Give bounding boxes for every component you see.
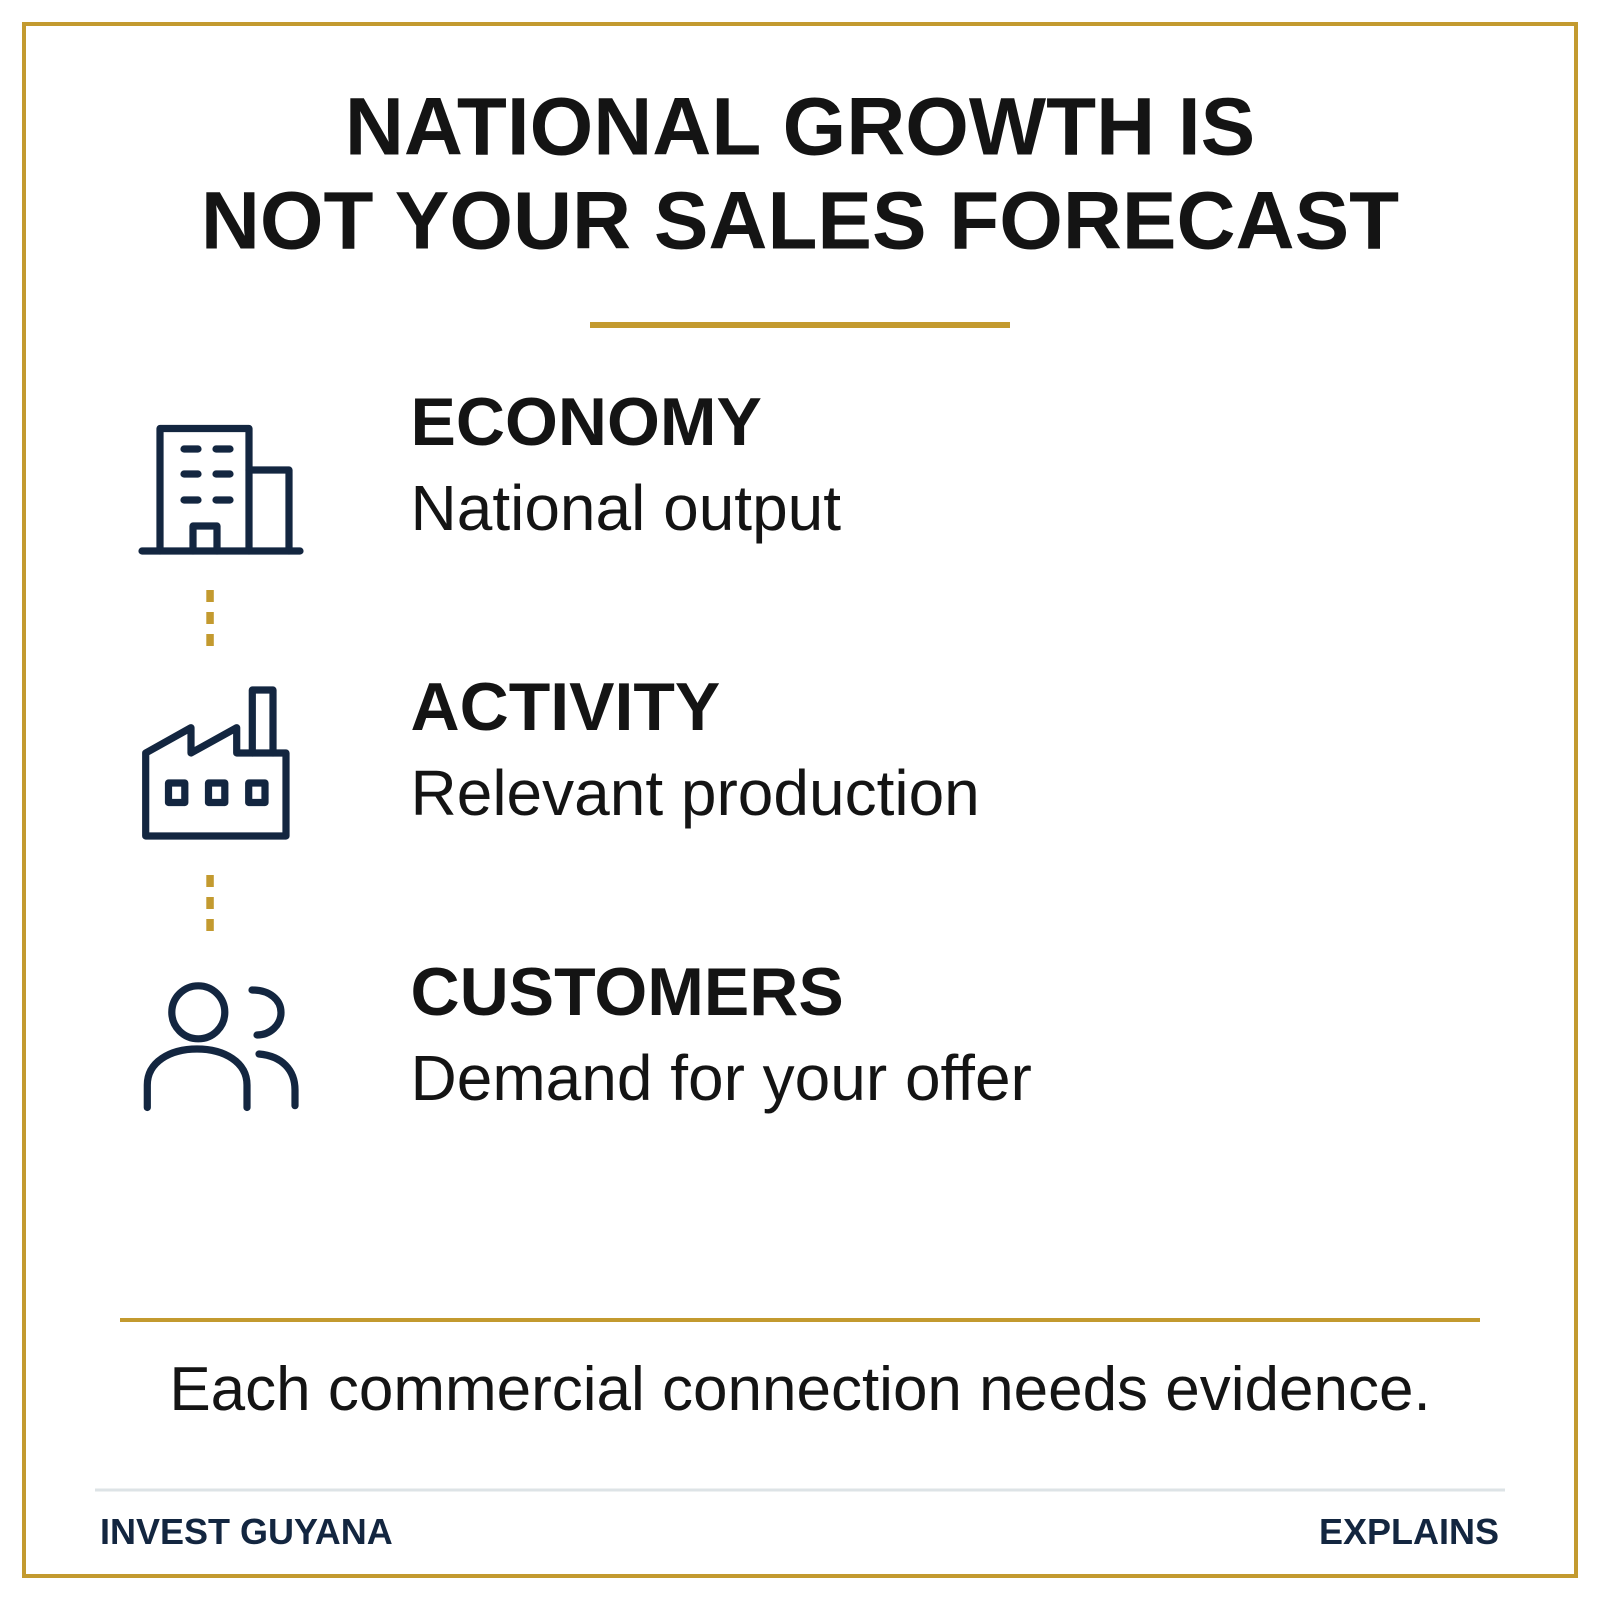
footer rule: [95, 1488, 1505, 1492]
row: customers: CUSTOMERS: [410, 954, 844, 1030]
icon: factory: [146, 690, 286, 836]
row: customers: [410, 954, 1032, 1114]
footer left label: INVEST GUYANA: [100, 1511, 393, 1552]
closing rule: [120, 1318, 1480, 1322]
title: NOT YOUR SALES FORECAST: [201, 176, 1399, 266]
connector dots: activity to customers: [206, 875, 214, 931]
row: activity: ACTIVITY: [410, 669, 720, 745]
row: customers: Demand for your offer: [410, 1042, 1032, 1114]
row: economy: ECONOMY: [410, 384, 762, 460]
closing statement: Each commercial connection needs evidence.: [169, 1355, 1431, 1424]
title: NATIONAL GROWTH IS: [345, 82, 1255, 172]
title underline: [590, 322, 1010, 328]
connector dots: economy to activity: [206, 590, 214, 646]
icon: office buildings: [142, 428, 300, 551]
row: economy: [410, 384, 841, 544]
row: economy: National output: [410, 472, 841, 544]
footer right label: EXPLAINS: [1319, 1511, 1499, 1552]
row: activity: [410, 669, 980, 829]
title: [201, 82, 1399, 266]
icon: people: [147, 986, 295, 1108]
row: activity: Relevant production: [410, 757, 980, 829]
